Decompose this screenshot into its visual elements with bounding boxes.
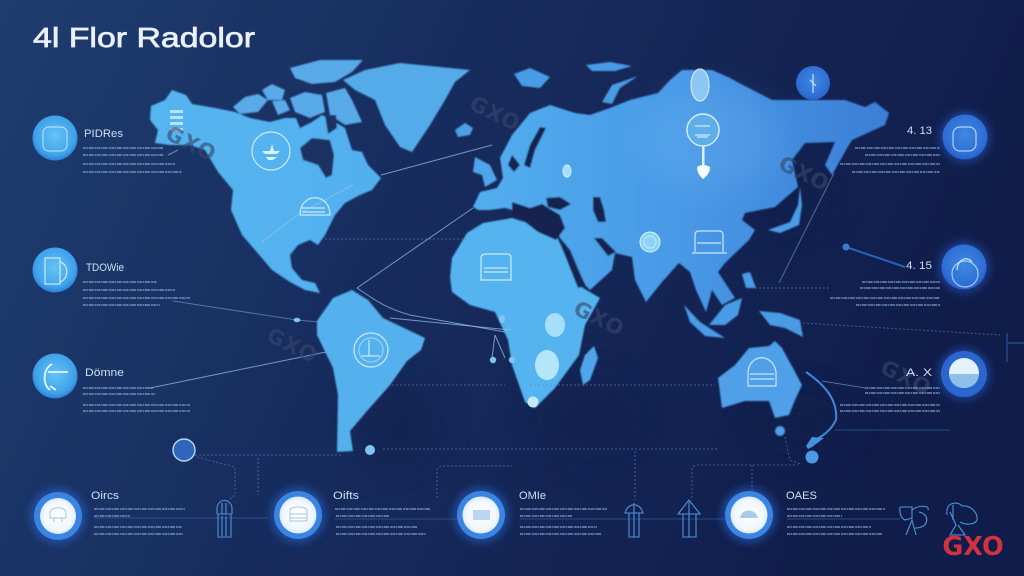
continent: Eurasia xyxy=(473,70,889,312)
continent: Greenland xyxy=(343,63,470,152)
watermarks: GXO xyxy=(466,91,524,136)
marker: China laptop xyxy=(692,231,727,253)
icon: bottom 4 xyxy=(721,487,777,543)
marker: India disc xyxy=(640,232,660,252)
map glow xyxy=(640,90,780,190)
text block: right 2 xyxy=(830,282,940,305)
panel: left item 1 xyxy=(32,116,182,172)
continent: South America xyxy=(317,290,425,452)
icon: bottom 1 xyxy=(30,488,86,544)
node: New Zealand xyxy=(806,450,818,464)
icon: left 1 xyxy=(32,116,78,160)
text block: bottom 2 xyxy=(335,509,430,534)
hook: New Zealand xyxy=(806,372,836,464)
marker: East Africa oval xyxy=(545,313,565,337)
marker: North Africa box xyxy=(481,254,511,280)
icon: bottom 3 xyxy=(453,487,509,543)
icon: squiggle 2 xyxy=(947,503,977,535)
heading: right 2: 4. 15 xyxy=(906,260,932,272)
panel: bottom item 1 xyxy=(30,488,185,544)
marker: Russia pin xyxy=(687,114,719,179)
node: bottom ring xyxy=(173,439,195,461)
panel: right item 3 xyxy=(840,348,990,411)
marker: Central Asia oval xyxy=(563,165,571,177)
heading: bottom 1: Oircs xyxy=(91,490,120,502)
map shadows xyxy=(350,160,850,475)
panel: left item 3 xyxy=(32,354,190,411)
logo: GXO: GXO xyxy=(942,532,1004,562)
panel: bottom item 3 xyxy=(453,487,607,543)
marker: South Africa oval xyxy=(535,350,559,380)
marker: Brazil ring xyxy=(354,333,388,367)
text block: left 1 xyxy=(83,148,182,172)
icon: right 1 xyxy=(939,111,991,163)
watermarks: GXO xyxy=(162,121,220,166)
world map xyxy=(150,60,889,452)
text block: right 3 xyxy=(840,388,940,411)
heading: bottom 4: OAES xyxy=(786,490,817,502)
title: 4l Flor Radolor xyxy=(33,22,255,53)
heading: right 3: A. X xyxy=(906,367,933,379)
marker: Australia dome xyxy=(748,358,776,386)
marker: USA dome xyxy=(300,198,330,215)
watermarks: GXO xyxy=(877,355,935,400)
island: Britain xyxy=(473,157,497,187)
heading: left 2: TDOWie xyxy=(86,262,124,274)
watermarks: GXO xyxy=(775,151,833,196)
heading: left 3: Dömne xyxy=(85,367,124,379)
marker: Siberia oval xyxy=(691,69,709,101)
heading: bottom 3: OMIe xyxy=(519,490,546,502)
icon: right 3 xyxy=(938,348,990,400)
island: Tasmania xyxy=(775,426,785,436)
icon: right 2 xyxy=(938,241,990,293)
panel: right item 1 xyxy=(840,111,991,172)
icon: left 2 xyxy=(32,248,78,292)
text block: left 2 xyxy=(83,282,190,305)
heading: left 1: PIDRes xyxy=(84,128,124,140)
marker: Canada ring xyxy=(252,132,290,170)
heading: right 1: 4. 13 xyxy=(907,125,932,137)
connector lines xyxy=(94,145,1024,519)
icon: squiggle 1 xyxy=(900,506,928,535)
icon: left 3 xyxy=(32,354,78,398)
heading: bottom 2: Oifts xyxy=(333,490,360,502)
map markers xyxy=(170,69,776,455)
top-right map disc xyxy=(796,66,830,100)
watermarks: GXO xyxy=(570,296,628,341)
text block: right 1 xyxy=(840,148,940,172)
arctic islands xyxy=(233,60,363,125)
dark seas: Mediterranean, Black, Caspian, Red, Gulf, Baltic xyxy=(508,127,616,288)
continent: Australia xyxy=(718,341,802,418)
text block: bottom 3 xyxy=(520,509,607,534)
panel: bottom item 2 xyxy=(270,487,430,543)
text block: bottom 4 xyxy=(787,509,885,534)
dark channels: Hudson Bay xyxy=(300,115,337,178)
icon: bottom 2 xyxy=(270,487,326,543)
island: Iceland xyxy=(455,123,473,137)
marker: network nodes xyxy=(294,315,515,455)
icon: building 2 xyxy=(625,503,643,537)
marker: South Africa dot xyxy=(528,396,538,408)
watermarks: GXO xyxy=(263,323,321,368)
watermarks xyxy=(162,91,935,400)
marker: Alaska stack xyxy=(170,110,183,131)
continent: Africa xyxy=(450,218,600,408)
island: Madagascar xyxy=(580,346,598,385)
panel: right item 2 xyxy=(830,241,990,305)
arctic and asian islands xyxy=(514,62,803,338)
panel: bottom item 4 xyxy=(721,487,885,543)
icon: building 3 xyxy=(678,500,700,537)
icon: building 1 xyxy=(217,500,232,537)
text block: left 3 xyxy=(83,388,190,411)
text block: bottom 1 xyxy=(94,509,185,534)
panel: left item 2 xyxy=(32,248,190,305)
continent: North America xyxy=(150,90,381,293)
